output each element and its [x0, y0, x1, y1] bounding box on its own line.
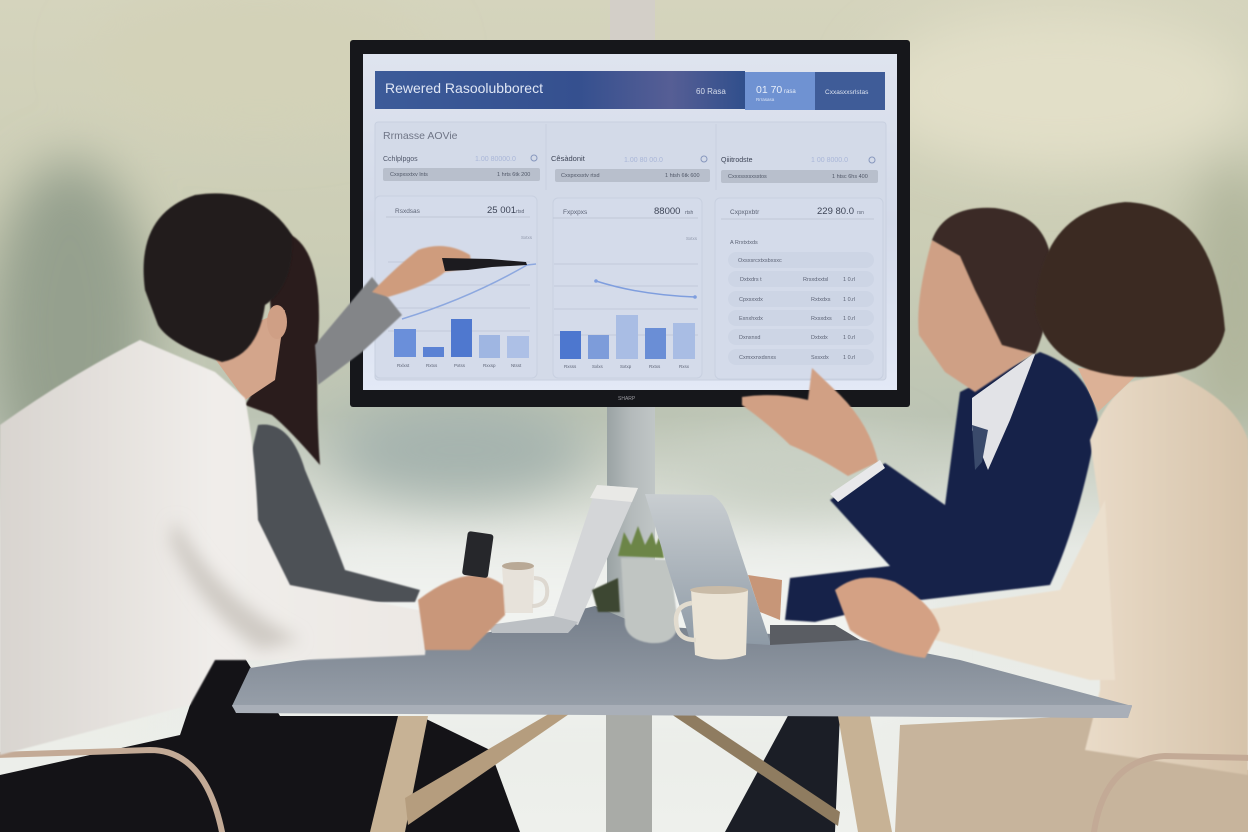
chart card 2: 88000 — [654, 206, 680, 217]
table card: Rrsxdxxtsl — [803, 277, 828, 283]
neck — [1078, 368, 1140, 412]
chart card 1 — [375, 196, 537, 378]
right laptop — [645, 494, 860, 645]
chart card 1: Rxxsp — [483, 363, 496, 368]
KPI column 1 — [383, 155, 540, 181]
window pillar — [606, 0, 655, 832]
glass vase — [621, 558, 678, 643]
table card: Dxtxdrs t — [740, 277, 762, 283]
KPI column 2: 1 htsh 6tk 600 — [665, 173, 700, 179]
dark hair — [144, 193, 292, 362]
chart card 1: Rxtxs — [426, 363, 438, 368]
KPI column 3: 1 htsc 6hs 400 — [832, 174, 868, 180]
chart card 1: Rsxdsas — [395, 208, 421, 215]
hand with phone — [418, 575, 505, 650]
woman in beige blazer torso — [1078, 368, 1248, 775]
chart card 1: Pxtss — [454, 363, 466, 368]
pointing hand and cuff — [742, 368, 885, 502]
table card: Oxsxsrcxtxsbxsxc — [738, 258, 782, 264]
KPI column 3: Qiiitrodste — [721, 157, 753, 164]
neck and face — [918, 240, 1035, 392]
dashboard header bar: Cxxasxxsrlstas — [825, 89, 869, 96]
KPI column 3: 1 00 8000.0 — [811, 157, 848, 164]
dark trousers — [725, 712, 840, 832]
small plant — [618, 526, 664, 558]
left laptop — [488, 485, 638, 633]
presentation pointer — [442, 258, 527, 271]
table card: Sxsxdx — [811, 355, 829, 361]
man's trousers left — [0, 650, 520, 832]
KPI column 2 — [551, 154, 710, 182]
navy jacket — [785, 352, 1098, 622]
table card — [715, 198, 883, 379]
front mug — [676, 586, 748, 660]
chart card 2 — [553, 198, 702, 378]
table card: Exnxhxdx — [739, 316, 763, 322]
woman in grey jacket — [240, 232, 527, 602]
chart card 2: Sxtxs — [686, 236, 698, 241]
table card: Dxnxnxd — [739, 335, 760, 341]
dashboard main panel — [375, 122, 886, 380]
white shirt — [0, 340, 428, 755]
grey jacket — [240, 425, 420, 602]
dashboard header bar — [375, 71, 885, 110]
right chair — [1094, 756, 1248, 832]
right chair and trousers — [895, 715, 1248, 832]
chart card 1: Ntsst — [511, 363, 522, 368]
long dark hair — [245, 232, 320, 465]
woman's arm and hands — [835, 500, 1115, 680]
table card: 1 0.rl — [843, 355, 855, 361]
man in navy suit — [725, 208, 1098, 832]
KPI column 2: Cxxpxxsxtv rtsd — [561, 173, 600, 179]
chart card 1: 25 001 — [487, 205, 516, 216]
shirt collar and tie — [972, 352, 1036, 470]
table card: Cxpxpxbtr — [730, 209, 760, 216]
KPI column 1: Cchlplpgos — [383, 156, 418, 163]
KPI column 1: 1.00 80000.0 — [475, 156, 516, 163]
chart card 1: rtsd — [516, 209, 525, 215]
dashboard main panel: Rrmasse AOVie — [383, 130, 458, 142]
KPI column 1: 1 hrts 6tk 200 — [497, 172, 530, 178]
smartphone — [462, 531, 494, 578]
table card: Dxtxdx — [811, 335, 828, 341]
dashboard header bar: Rrrasasa — [756, 97, 775, 102]
monitor brand label: SHARP — [618, 396, 636, 402]
seated man in white shirt — [0, 193, 505, 755]
wall monitor — [350, 40, 910, 407]
raised sleeve — [315, 277, 402, 385]
chart card 2: Rxtxs — [649, 364, 661, 369]
dashboard header bar: rasa — [784, 89, 796, 95]
ear — [267, 305, 287, 339]
table card: 1 0.rl — [843, 335, 855, 341]
chart card 1: Sxtxs — [521, 235, 533, 240]
table card: 1 0.rl — [843, 297, 855, 303]
KPI column 1: Cxxpxsxtxv lnts — [390, 172, 428, 178]
table card: rsn — [857, 210, 864, 216]
brown hair — [932, 208, 1052, 354]
back mug — [502, 562, 547, 613]
KPI column 2: 1.00 80 00.0 — [624, 157, 663, 164]
trend line — [596, 281, 695, 297]
KPI column 3 — [721, 157, 878, 183]
chart card 2: Rxsx — [679, 364, 690, 369]
table top — [232, 606, 1132, 718]
chart card 2: rtsh — [685, 210, 694, 216]
woman's bob hair — [1035, 202, 1225, 377]
KPI column 2: Cêsàdonit — [551, 154, 586, 163]
table — [232, 606, 1132, 832]
raised hand — [372, 246, 472, 297]
shirt fold shadow — [170, 520, 300, 650]
table card: Rxsxdxs — [811, 316, 832, 322]
table card: Cxmxxnxdxnxs — [739, 355, 776, 361]
trend line — [402, 264, 536, 319]
left chair — [0, 750, 222, 832]
dashboard header bar: 60 Rasa — [696, 87, 726, 96]
table card: Cpxsxxdx — [739, 297, 763, 303]
neck — [205, 310, 285, 400]
table card: 1 0.rl — [843, 316, 855, 322]
chart card 2: Fxpxpxs — [563, 209, 588, 216]
dashboard header bar: 01 70 — [756, 84, 782, 96]
chart card 2: Rxsss — [564, 364, 577, 369]
chart card 2: Sxtxp — [620, 364, 632, 369]
table card: 229 80.0 — [817, 206, 854, 217]
table card: Rxtxdxs — [811, 297, 831, 303]
chart card 1: Rxlxst — [397, 363, 410, 368]
dark plant shadow — [592, 578, 620, 612]
dashboard header bar: Rewered Rasoolubborect — [385, 80, 543, 96]
table legs and braces — [370, 712, 892, 832]
KPI column 3: Cxxxssxsxsstos — [728, 174, 767, 180]
table card: A Rrxtxtxds — [730, 240, 758, 246]
chart card 2: Sxlxs — [592, 364, 604, 369]
hand on laptop — [748, 575, 782, 620]
table card: 1 0.rl — [843, 277, 855, 283]
